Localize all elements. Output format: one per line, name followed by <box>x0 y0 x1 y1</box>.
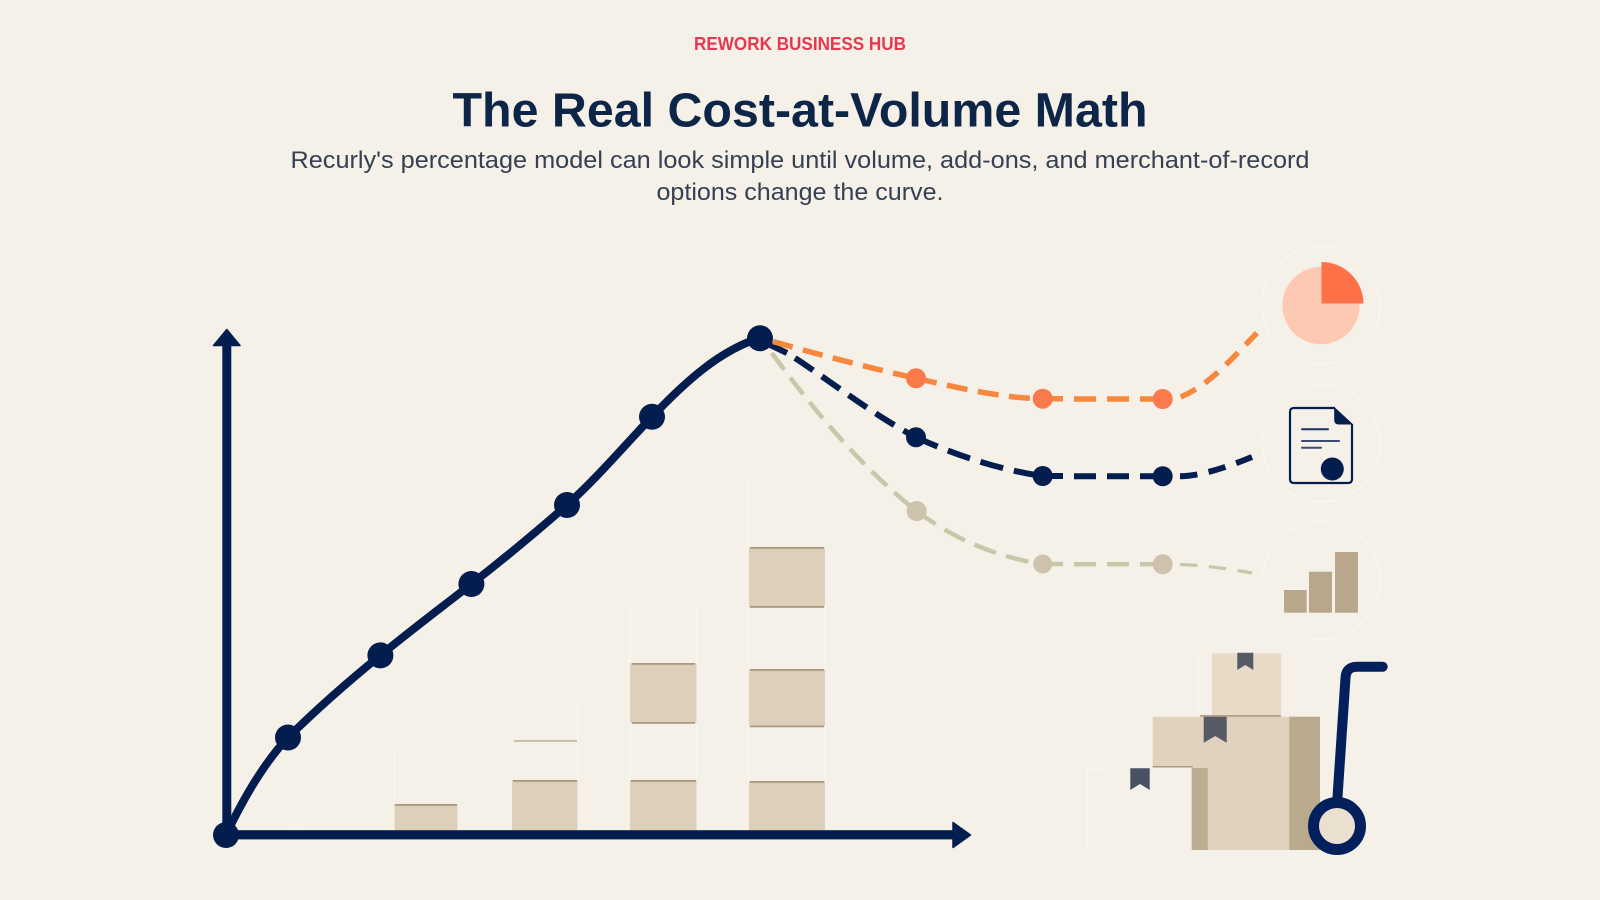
kicker: brand label: REWORK BUSINESS HUB <box>694 34 906 54</box>
icon: hand truck <box>1314 667 1383 850</box>
subtitle: options change the curve. <box>656 179 944 206</box>
icon: rising bars <box>1262 522 1380 640</box>
bar chart: stacked volume boxes <box>296 480 825 831</box>
subtitle: Recurly's percentage model can look simple until volume, add-ons, and merchant-of-record <box>290 147 1310 174</box>
icon: box labels <box>1130 653 1253 790</box>
illustration: boxes on hand truck <box>1088 653 1383 850</box>
dashed line: tan scenario <box>772 353 1252 574</box>
icon: document with seal <box>1262 384 1380 502</box>
dashed line: navy scenario <box>764 342 1252 486</box>
title: The Real Cost-at-Volume Math <box>452 84 1148 138</box>
chart axes <box>214 330 970 848</box>
main growth curve <box>213 325 773 848</box>
dashed line: orange scenario <box>773 333 1257 409</box>
icon: pie chart <box>1262 246 1380 364</box>
subtitle <box>290 147 1310 206</box>
